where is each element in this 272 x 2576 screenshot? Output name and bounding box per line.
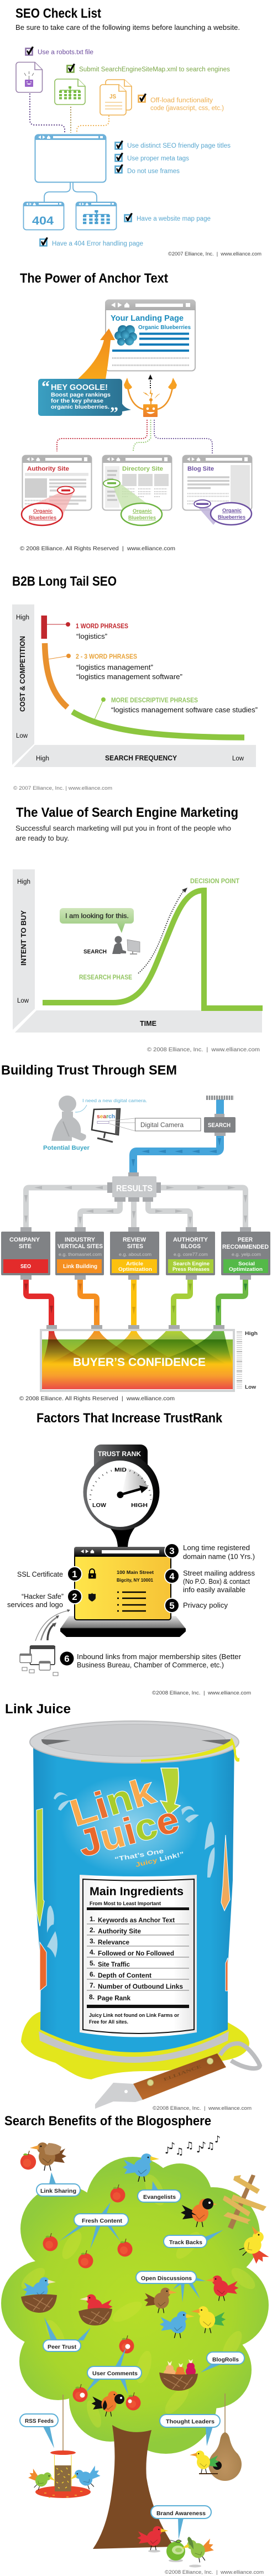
panel: B2B long tail SEO <box>12 574 258 791</box>
copyright: ©2007 Elliance, Inc. | www.elliance.com <box>168 251 261 257</box>
label: research phase: RESEARCH PHASE <box>79 974 132 981</box>
copyright: © 2007 Elliance, Inc. | www.elliance.com <box>13 785 112 791</box>
y axis: intent to buy: Low <box>17 998 29 1004</box>
callout: hey google: Boost page rankings <box>51 392 111 398</box>
callout: hey google: HEY GOOGLE! <box>51 383 108 392</box>
icon: green apple <box>166 2540 185 2562</box>
checklist item: sitemap submission <box>67 64 230 73</box>
icon: bird feeder with birds <box>24 2450 104 2498</box>
ingredients label: Site Traffic <box>98 1960 130 1968</box>
number 4: street mailing address: 4 <box>169 1571 175 1582</box>
bird: chicks in nest <box>159 2359 198 2391</box>
icon: off-load JS documents <box>100 80 132 115</box>
apples: fresh content <box>43 2184 133 2269</box>
intro text: Be sure to take care of the following items before launching a website. <box>15 23 240 32</box>
checklist item: off-load code: Off-load functionality <box>150 97 213 104</box>
y axis: cost and competition: Low <box>16 733 28 739</box>
checklist items: titles, meta tags, frames: Use distinct SEO friendly page titles <box>127 143 231 149</box>
title: Building Trust Through SEM: Building Trust Through SEM <box>1 1063 177 1078</box>
ingredients label: Relevance <box>98 1938 129 1946</box>
callout: open discussions: Open Discussions <box>141 2275 192 2282</box>
icon: shield <box>88 1593 96 1602</box>
number 1: SSL certificate <box>17 1567 82 1581</box>
number 5: privacy policy: Privacy policy <box>183 1602 228 1609</box>
icon: signpost <box>223 2175 266 2229</box>
box: authority blogs: e.g. core77.com <box>174 1252 208 1257</box>
box: review sites: SITES <box>127 1243 143 1250</box>
site browser window: 100 Main Street <box>117 1569 154 1575</box>
music notes: ♫ <box>185 2140 193 2151</box>
checklist item: site map page <box>125 213 211 222</box>
bird: yellow track back bird <box>232 2223 272 2269</box>
ingredients label: 7. <box>90 1981 95 1989</box>
connectors: robot to linking sites <box>57 420 212 453</box>
ingredients label: Depth of Content <box>98 1972 151 1979</box>
number 2: hacker safe: 2 <box>72 1592 77 1602</box>
number 3: long registered domain <box>165 1543 255 1561</box>
number 3: long registered domain: 3 <box>169 1546 175 1556</box>
panel: link juice <box>5 1702 260 2111</box>
ingredients label: 6. <box>90 1970 95 1978</box>
site window: authority site: Authority Site <box>27 466 69 472</box>
ingredients label: Main Ingredients <box>90 1885 184 1898</box>
logo: tagline <box>114 1848 185 1869</box>
box: authority blogs: AUTHORITY <box>173 1237 208 1243</box>
intro text <box>15 824 231 842</box>
box: review sites: e.g. about.com <box>119 1252 151 1257</box>
box: peer recommended <box>221 1227 270 1280</box>
checklist item: off-load code <box>138 93 224 112</box>
number 1: SSL certificate: 1 <box>72 1569 77 1579</box>
checklist items: titles, meta tags, frames: Use proper meta tags <box>127 155 189 162</box>
callout: evangelists: Evangelists <box>143 2194 176 2200</box>
callout: hey google: organic blueberries. <box>51 404 109 410</box>
landing page window: Organic Blueberries <box>138 325 191 331</box>
ingredients label: Authority Site <box>98 1927 141 1935</box>
logo: Link Juice: Juice <box>74 1798 184 1865</box>
y axis: cost and competition <box>12 604 34 765</box>
copyright: ©2008 Elliance, Inc. | www.elliance.com <box>153 2105 252 2111</box>
speech bubble: I am looking for this: I am looking for this. <box>65 912 129 920</box>
box: company site <box>1 1227 50 1280</box>
number 4: street mailing address <box>165 1569 255 1594</box>
bird: green near apple <box>180 2533 217 2567</box>
x axis: time: TIME <box>140 1020 156 1028</box>
thought: need a new digital camera: I need a new digital camera. <box>82 1098 147 1103</box>
panel: factors that increase trustrank <box>7 1411 255 1696</box>
logo: exclamation arrow <box>160 1768 180 1815</box>
confidence scale: Low <box>245 1384 257 1390</box>
number 4: street mailing address: info easily available <box>183 1586 245 1594</box>
callout: link sharing <box>36 2172 80 2196</box>
callout: blogrolls: BlogRolls <box>212 2356 239 2363</box>
number 6: inbound links: Business Bureau, Chamber of Commerce, etc.) <box>77 1661 224 1669</box>
number 2: hacker safe: services and logo <box>7 1601 63 1609</box>
title: Search Benefits of the Blogosphere: Search Benefits of the Blogosphere <box>4 2114 211 2129</box>
rope: feeder <box>62 2395 64 2451</box>
callout: hey google: ” <box>110 404 118 422</box>
connector: sitemap to site <box>70 107 71 133</box>
music notes: ♫ <box>206 2141 215 2152</box>
label: 2-3 word phrases: “logistics management software” <box>76 673 182 681</box>
box: company site: COMPANY <box>9 1237 40 1243</box>
label: 2-3 word phrases: 2 - 3 WORD PHRASES <box>76 654 137 660</box>
music notes: ♪ <box>200 2140 206 2151</box>
box: review sites: Article <box>126 1261 143 1267</box>
callout: rss feeds <box>20 2414 58 2448</box>
callout: peer trust <box>43 2317 91 2351</box>
confidence scale: High <box>245 1331 258 1337</box>
number 4: street mailing address: Street mailing address <box>183 1569 255 1577</box>
gauge: trust rank meter: LOW <box>92 1503 107 1509</box>
checklist item: 404 page: Have a 404 Error handling page <box>52 241 143 247</box>
label: decision point: DECISION POINT <box>190 878 239 885</box>
icon: search robot <box>124 378 177 417</box>
icon: off-load JS documents: JS <box>109 93 116 100</box>
search box <box>204 1114 236 1136</box>
ingredients label: 1. <box>90 1915 95 1923</box>
arrow to landing page <box>77 328 115 379</box>
callout: brand awareness: Brand Awareness <box>156 2510 206 2517</box>
box: industry vertical sites: VERTICAL SITES <box>57 1243 103 1250</box>
connector: JS files to site <box>77 116 109 133</box>
callout: evangelists <box>138 2181 181 2202</box>
music notes: ♫ <box>175 2146 184 2157</box>
y axis: intent to buy: High <box>17 879 30 885</box>
ingredients label: Keywords as Anchor Text <box>98 1916 175 1924</box>
chart: buyer's confidence: BUYER’S CONFIDENCE <box>73 1356 206 1369</box>
callout: thought leaders <box>160 2415 220 2446</box>
rope: birdhouse <box>224 2394 226 2433</box>
ingredients label: From Most to Least Important <box>90 1901 161 1906</box>
y axis: intent to buy <box>13 869 35 1030</box>
label: search: SEARCH <box>83 948 107 955</box>
ingredients label: 3. <box>90 1937 95 1945</box>
callout: open discussions <box>136 2271 206 2302</box>
checklist item: site map page: Have a website map page <box>137 216 211 222</box>
box: authority blogs: Search Engine <box>173 1261 210 1267</box>
speech bubble: I am looking for this <box>60 908 134 933</box>
label: 1 word phrases: “logistics” <box>76 633 107 640</box>
pipe: input to search box <box>206 1098 234 1115</box>
bird: red at trunk base <box>137 2526 168 2553</box>
checklist item: robots.txt <box>25 46 93 56</box>
logo: tagline: “That’s One <box>114 1848 164 1863</box>
input box: digital camera <box>135 1118 201 1131</box>
box: authority blogs: BLOGS <box>181 1243 201 1250</box>
main web page window <box>35 134 106 182</box>
x axis: time <box>15 1010 262 1033</box>
panel: the value of search engine marketing <box>13 805 263 1053</box>
copyright: © 2008 Elliance. All Rights Reserved | www.elliance.com <box>19 1395 175 1402</box>
panel: the power of anchor text <box>20 271 252 552</box>
number 6: inbound links <box>60 1651 241 1669</box>
gauge: trust rank meter: MID <box>114 1467 127 1473</box>
juice splashes <box>47 1792 215 1958</box>
birds: oriole and apples <box>73 2384 140 2417</box>
arrows: inbound links <box>35 1609 70 1641</box>
callout: track backs <box>164 2230 223 2248</box>
callout: fresh content <box>60 2202 128 2249</box>
connector: robots to site <box>30 93 65 133</box>
logo: Link Juice <box>65 1769 184 1865</box>
birds: open discussion group <box>144 2276 239 2338</box>
checklist items: titles, meta tags, frames: Do not use frames <box>127 168 180 175</box>
music notes: ♪ <box>165 2145 171 2156</box>
label: more descriptive phrases: MORE DESCRIPTIVE PHRASES <box>111 697 198 704</box>
pipes: site types to buyer's confidence <box>24 1280 247 1329</box>
number 2: hacker safe: “Hacker Safe” <box>22 1593 64 1600</box>
callout: hey google <box>38 378 131 422</box>
title: Link Juice: Link Juice <box>5 1702 71 1717</box>
box: peer recommended: e.g. yelp.com <box>232 1252 261 1257</box>
callout: user comments: User Comments <box>92 2370 138 2377</box>
checklist item: off-load code: code (javascript, css, etc.) <box>150 105 224 112</box>
icon: sitemap XML document <box>55 79 85 105</box>
panel: search benefits of the blogosphere <box>1 2114 272 2575</box>
copyright: © 2008 Elliance. All Rights Reserved | www.elliance.com <box>20 545 175 552</box>
checklist item: robots.txt: Use a robots.txt file <box>38 49 93 56</box>
juice can <box>30 1721 239 2063</box>
number 2: hacker safe <box>7 1589 82 1609</box>
x axis: search frequency: High <box>36 755 49 762</box>
x axis: search frequency: Low <box>232 755 244 762</box>
site window: directory site: Blueberries <box>128 515 156 520</box>
checklist item: 404 page <box>40 237 143 247</box>
number 5: privacy policy: 5 <box>169 1600 175 1611</box>
arrow: robot up to landing page <box>148 374 153 388</box>
number 6: inbound links: Inbound links from major membership sites (Better <box>77 1653 241 1661</box>
pipe: search to results <box>132 1136 221 1173</box>
title: Factors That Increase TrustRank: Factors That Increase TrustRank <box>36 1411 223 1426</box>
gauge: trust rank meter <box>83 1445 159 1548</box>
icon: search monitor: search <box>97 1113 115 1120</box>
404 error page window <box>23 202 64 230</box>
box: peer recommended: RECOMMENDED <box>222 1244 269 1250</box>
intent curve <box>43 890 263 1008</box>
ingredients label <box>80 1875 197 2037</box>
panel: SEO check list <box>15 6 261 257</box>
number 3: long registered domain: Long time registered <box>183 1544 250 1552</box>
label: more descriptive phrases <box>111 697 258 714</box>
icon: can opener: ELLIANCE <box>163 2064 202 2082</box>
site window: authority site: Blueberries <box>29 515 56 520</box>
box: company site: SITE <box>19 1243 32 1250</box>
pipes: results to site types <box>24 1186 247 1227</box>
callout: rss feeds: RSS Feeds <box>25 2418 54 2424</box>
y axis: intent to buy: INTENT TO BUY <box>20 910 28 966</box>
site window: blog site: Blog Site <box>187 466 214 472</box>
icon: linking site windows <box>20 1646 58 1676</box>
music notes: ♪ <box>215 2134 221 2145</box>
bitten apple: user comment <box>119 2335 134 2354</box>
site window: blog site <box>182 455 252 525</box>
title: The Value of Search Engine Marketing: The Value of Search Engine Marketing <box>16 805 238 820</box>
input box: digital camera: Digital Camera <box>140 1121 184 1129</box>
site browser window <box>60 1547 186 1637</box>
label: 2-3 word phrases <box>76 654 182 681</box>
music notes <box>165 2134 221 2157</box>
callout: track backs: Track Backs <box>169 2239 202 2246</box>
box: company site: SEO <box>20 1264 31 1270</box>
landing page window <box>105 300 196 371</box>
chart: buyer's confidence <box>41 1330 234 1391</box>
canopy leaf pattern <box>18 2172 259 2429</box>
site window: directory site <box>102 455 172 525</box>
checklist item: sitemap submission: Submit SearchEngineSiteMap.xml to search engines <box>79 66 230 73</box>
box: peer recommended: Social <box>238 1261 255 1267</box>
copyright: ©2008 Elliance, Inc. | www.elliance.com <box>165 2569 264 2575</box>
bird: oriole near signpost <box>181 2198 217 2227</box>
bird: singing evangelist <box>123 2153 159 2182</box>
ingredients label: Free for All sites. <box>89 2019 128 2025</box>
title: SEO Check List: SEO Check List <box>15 6 101 21</box>
confidence scale <box>239 1331 258 1390</box>
label: 2-3 word phrases: “logistics management” <box>76 664 153 671</box>
logo glow <box>61 1775 199 1875</box>
bird: link sharing, carrying apple <box>20 2142 66 2171</box>
number 6: inbound links: 6 <box>64 1654 70 1664</box>
copyright: © 2008 Elliance, Inc. | www.elliance.com <box>147 1046 260 1053</box>
tree trunk <box>93 2425 174 2549</box>
juice puddle <box>21 2011 249 2079</box>
ingredients label: 2. <box>90 1926 95 1934</box>
music notes: ♪ <box>196 2144 202 2155</box>
callout: brand awareness <box>151 2506 211 2540</box>
box: industry vertical sites: e.g. thomasnet.com <box>59 1252 102 1257</box>
ingredients label: 4. <box>90 1948 95 1956</box>
site window: blog site: Blueberries <box>218 514 245 520</box>
box: peer recommended: PEER <box>238 1237 253 1243</box>
icon: gourd birdhouse with bird <box>190 2432 242 2481</box>
box: peer recommended: Optimization <box>229 1266 263 1273</box>
results hub <box>107 1172 161 1202</box>
ingredients label: 8. <box>89 1993 95 2001</box>
box: industry vertical sites <box>55 1227 104 1280</box>
icon: blueberries <box>114 325 137 346</box>
bird: red in nest <box>79 2295 113 2325</box>
site browser window: Bigcity, NY 10001 <box>117 1577 153 1583</box>
checklist items: titles, meta tags, frames <box>115 140 231 175</box>
x axis: search frequency: SEARCH FREQUENCY <box>105 754 177 762</box>
box: industry vertical sites: Link Building <box>63 1264 97 1270</box>
icon: search monitor <box>92 1109 135 1142</box>
ingredients label: Page Rank <box>97 1994 130 2002</box>
ingredients label: Number of Outbound Links <box>98 1983 183 1990</box>
title: The Power of Anchor Text: The Power of Anchor Text <box>20 271 168 286</box>
title: B2B Long Tail SEO: B2B Long Tail SEO <box>12 574 117 589</box>
y axis: cost and competition: COST & COMPETITION <box>19 636 27 712</box>
callout: hey google: “ <box>41 378 50 396</box>
box: review sites: Optimization <box>118 1266 152 1273</box>
site window: authority site <box>22 455 92 525</box>
box: industry vertical sites: INDUSTRY <box>65 1237 96 1243</box>
tree canopy <box>1 2157 269 2454</box>
icon: can opener <box>95 2043 260 2109</box>
callout: peer trust: Peer Trust <box>48 2344 77 2350</box>
gauge: trust rank meter: TRUST RANK <box>98 1450 141 1458</box>
icon: potential buyer <box>43 1096 90 1151</box>
icon: potential buyer: Potential Buyer <box>43 1145 90 1151</box>
search box: SEARCH <box>208 1122 231 1129</box>
connectors to sub pages <box>44 182 97 202</box>
sitemap page window <box>76 202 117 230</box>
box: authority blogs: Press Releases <box>172 1266 210 1273</box>
box: authority blogs <box>166 1227 215 1280</box>
callout: link sharing: Link Sharing <box>40 2188 76 2194</box>
y axis: cost and competition: High <box>16 614 29 621</box>
number 3: long registered domain: domain name (10 Yrs.) <box>183 1553 255 1561</box>
callout: blogrolls <box>201 2352 244 2372</box>
icon: padlock <box>88 1569 96 1578</box>
results hub: RESULTS <box>116 1184 153 1193</box>
label: 1 word phrases: 1 WORD PHRASES <box>76 623 128 630</box>
bird: blue in nest <box>21 2277 57 2313</box>
ingredients label: Juicy Link not found on Link Farms or <box>89 2012 179 2018</box>
x axis: search frequency <box>14 745 256 767</box>
404 error page window: 404 <box>32 215 54 227</box>
logo: tagline: Juicy Link!” <box>135 1851 185 1869</box>
callout: fresh content: Fresh Content <box>82 2218 123 2224</box>
box: review sites <box>110 1227 159 1280</box>
copyright: ©2008 Elliance, Inc. | www.elliance.com <box>152 1690 251 1696</box>
gauge: trust rank meter: HIGH <box>131 1503 148 1509</box>
label: more descriptive phrases: “logistics management software case studies” <box>111 706 258 714</box>
icon: person searching at computer <box>112 936 140 954</box>
music notes: ♪ <box>169 2141 175 2152</box>
number 5: privacy policy <box>165 1598 228 1613</box>
panel: building trust through SEM <box>1 1063 270 1402</box>
number 4: street mailing address: (No P.O. Box) & contact <box>183 1578 250 1586</box>
label: 1 word phrases <box>76 623 128 640</box>
site window: directory site: Directory Site <box>122 466 163 472</box>
callout: user comments <box>86 2348 142 2395</box>
site window: directory site: Organic <box>133 508 152 514</box>
ingredients label: 5. <box>90 1959 95 1967</box>
long tail curve <box>41 616 244 738</box>
landing page window: Your Landing Page <box>111 314 184 323</box>
intro text: are ready to buy. <box>15 834 69 842</box>
intro text: Successful search marketing will put you in front of the people who <box>15 824 231 832</box>
callout: thought leaders: Thought Leaders <box>166 2418 215 2425</box>
number 1: SSL certificate: SSL Certificate <box>17 1571 63 1578</box>
arrow: research to decision <box>138 888 187 973</box>
logo: Link Juice: Link <box>65 1769 160 1834</box>
callout: hey google: for the key phrase <box>51 398 103 404</box>
site window: blog site: Organic <box>222 508 242 513</box>
site window: authority site: Organic <box>33 508 53 514</box>
icon: robots file document <box>16 62 42 92</box>
box: review sites: REVIEW <box>123 1237 147 1243</box>
side graphics: wrap-around logo letters <box>36 1808 230 1991</box>
ingredients label: Followed or No Followed <box>98 1949 174 1957</box>
